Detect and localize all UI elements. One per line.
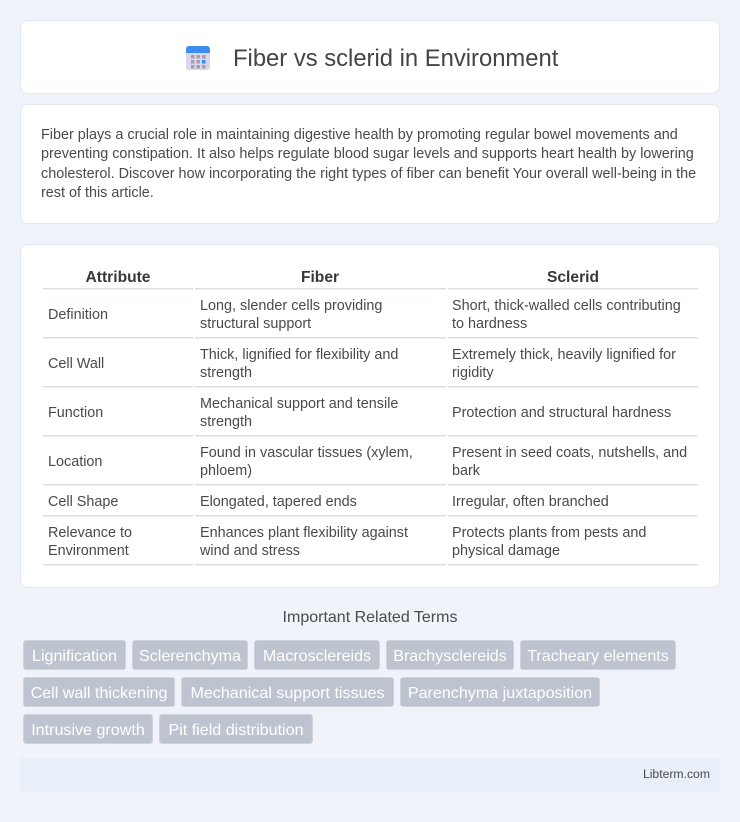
tag: Brachysclereids	[393, 647, 507, 665]
Location: fiber: phloem)	[200, 463, 252, 479]
Location: fiber: Found in vascular tissues (xylem,	[200, 445, 413, 461]
Cell Wall: fiber: strength	[200, 365, 252, 381]
Cell Wall: fiber: Thick, lignified for flexibility and	[200, 347, 398, 363]
Function: sclerid: Protection and structural hardness	[452, 405, 671, 421]
tag: Intrusive growth	[31, 721, 145, 739]
Definition: sclerid: Short, thick-walled cells contributing	[452, 298, 681, 314]
tag	[23, 714, 153, 744]
tag	[132, 640, 248, 670]
Cell Wall: fiber	[200, 347, 398, 381]
Location: sclerid: Present in seed coats, nutshells, and	[452, 445, 687, 461]
Definition: fiber: Long, slender cells providing	[200, 298, 382, 314]
Location: sclerid	[452, 445, 687, 479]
title: Fiber vs sclerid in Environment	[233, 45, 558, 72]
Relevance: fiber: wind and stress	[200, 543, 300, 559]
table header: Attribute: Attribute	[86, 269, 150, 286]
tag: Tracheary elements	[527, 647, 669, 665]
Function: fiber	[200, 396, 398, 430]
tag: Sclerenchyma	[139, 647, 241, 665]
tag	[520, 640, 676, 670]
tag	[181, 677, 394, 707]
Cell Wall: sclerid	[452, 347, 676, 381]
table header: Fiber: Fiber	[301, 269, 339, 286]
Relevance: sclerid: Protects plants from pests and	[452, 525, 646, 541]
tag: Parenchyma juxtaposition	[408, 684, 592, 702]
tag: Pit field distribution	[168, 721, 304, 739]
Relevance: fiber: Enhances plant flexibility against	[200, 525, 408, 541]
Definition: sclerid: to hardness	[452, 316, 527, 332]
intro text: cholesterol. Discover how incorporating the right types of fiber can benefit Your overall well-being in the	[41, 166, 696, 182]
intro text: rest of this article.	[41, 185, 154, 201]
Relevance: fiber	[200, 525, 408, 559]
tag: Macrosclereids	[263, 647, 371, 665]
row: Cell Shape: Cell Shape	[48, 494, 118, 510]
row: Cell Wall: Cell Wall	[48, 356, 104, 372]
Definition: fiber: structural support	[200, 316, 311, 332]
Function: fiber: Mechanical support and tensile	[200, 396, 398, 412]
tag	[400, 677, 600, 707]
table header: Sclerid: Sclerid	[547, 269, 599, 286]
Cell Wall: sclerid: rigidity	[452, 365, 494, 381]
tag: Lignification	[32, 647, 117, 665]
tag: Mechanical support tissues	[190, 684, 385, 702]
Location: sclerid: bark	[452, 463, 480, 479]
Relevance: sclerid: physical damage	[452, 543, 560, 559]
tag	[23, 677, 175, 707]
row: Relevance to Environment: Relevance to	[48, 525, 132, 541]
intro text	[41, 127, 696, 201]
tag	[23, 640, 126, 670]
row: Location: Location	[48, 454, 102, 470]
footer bar	[20, 758, 720, 792]
Location: fiber	[200, 445, 413, 479]
row: Function: Function	[48, 405, 103, 421]
Relevance: sclerid	[452, 525, 646, 559]
Definition: fiber	[200, 298, 382, 332]
panel: comparison table	[20, 244, 720, 588]
Cell Shape: sclerid: Irregular, often branched	[452, 494, 609, 510]
row: Relevance to Environment: Environment	[48, 543, 129, 559]
icon: calendar	[186, 46, 210, 70]
header card	[20, 20, 720, 94]
intro text: preventing constipation. It also helps regulate blood sugar levels and supports heart health by lowering	[41, 146, 694, 162]
intro text: Fiber plays a crucial role in maintaining digestive health by promoting regular bowel movements and	[41, 127, 678, 143]
row: Relevance to Environment	[48, 525, 132, 559]
tag: Cell wall thickening	[31, 684, 167, 702]
Cell Wall: sclerid: Extremely thick, heavily lignified for	[452, 347, 676, 363]
heading: related terms: Important Related Terms	[283, 609, 457, 626]
Function: fiber: strength	[200, 414, 252, 430]
Definition: sclerid	[452, 298, 681, 332]
tag	[159, 714, 313, 744]
Cell Shape: fiber: Elongated, tapered ends	[200, 494, 357, 510]
row: Definition: Definition	[48, 307, 108, 323]
panel: intro	[20, 104, 720, 224]
tag	[386, 640, 514, 670]
footer text: Libterm.com	[643, 767, 710, 781]
tag	[254, 640, 380, 670]
